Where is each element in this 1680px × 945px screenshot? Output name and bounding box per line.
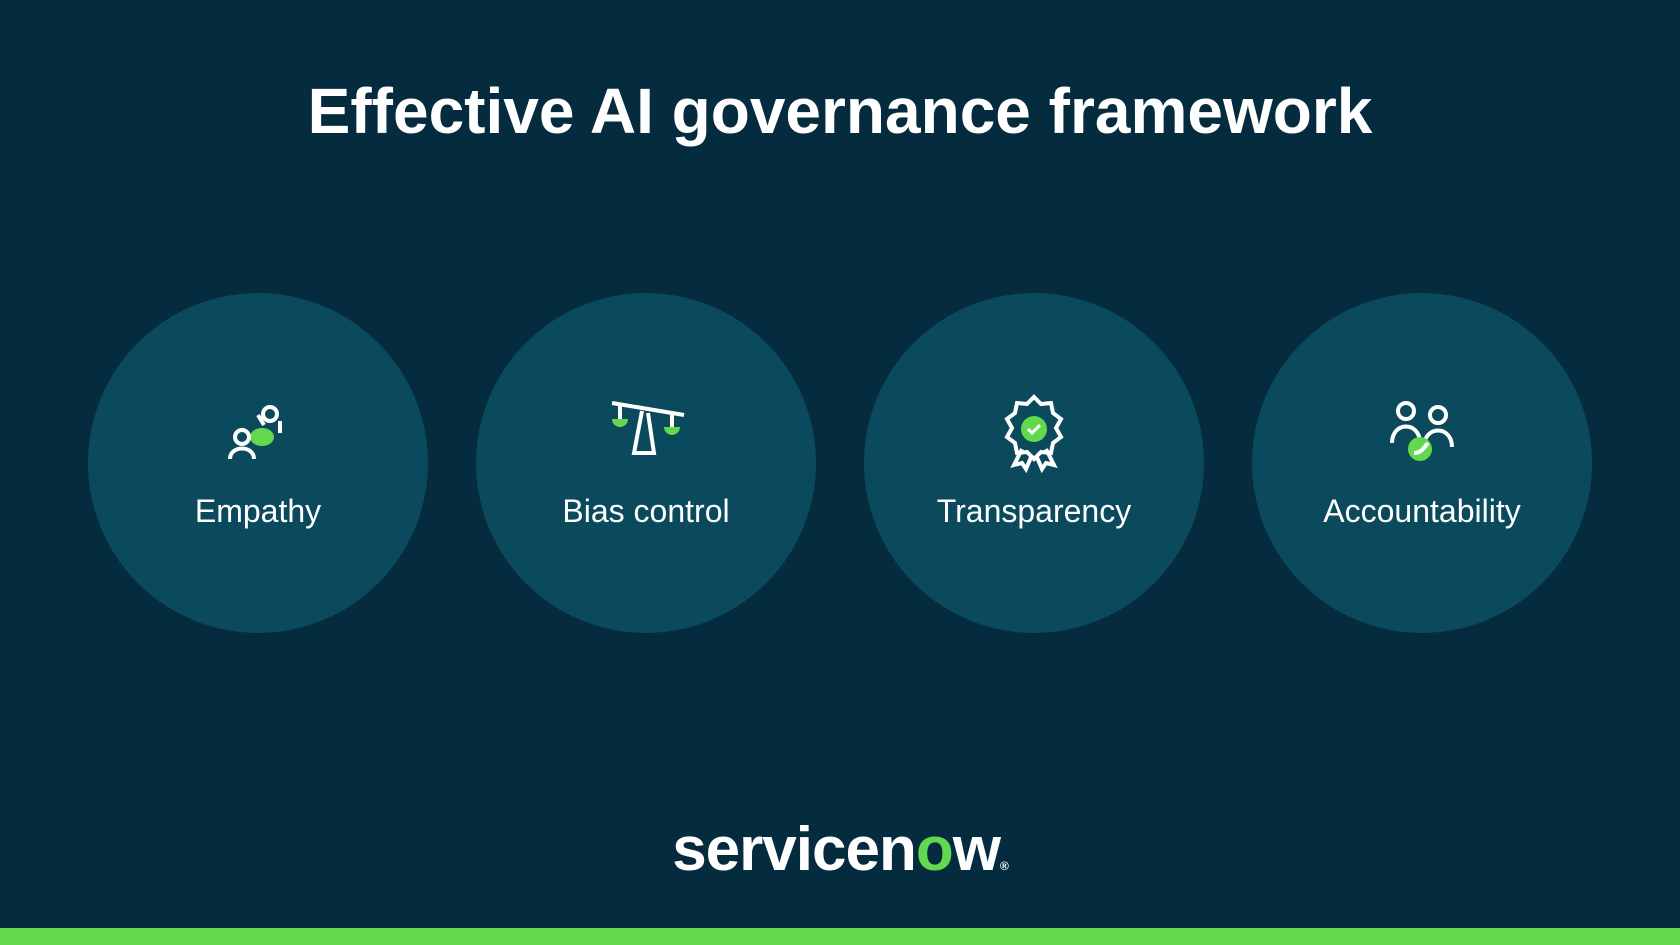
label: Empathy [195, 493, 321, 529]
icon: people [1390, 401, 1454, 461]
icon: scale [612, 401, 684, 455]
icon: empathy [228, 405, 282, 459]
icon: badge [1004, 394, 1064, 473]
label: Accountability [1323, 493, 1521, 529]
label: Transparency [937, 493, 1131, 529]
panel: empathy [88, 293, 428, 633]
panel: bias control [476, 293, 816, 633]
title: Effective AI governance framework [308, 75, 1372, 147]
logo: servicenow® [672, 815, 1008, 884]
panel: transparency [864, 293, 1204, 633]
panel: accountability [1252, 293, 1592, 633]
label: Bias control [562, 493, 730, 529]
green bar [0, 928, 1680, 945]
